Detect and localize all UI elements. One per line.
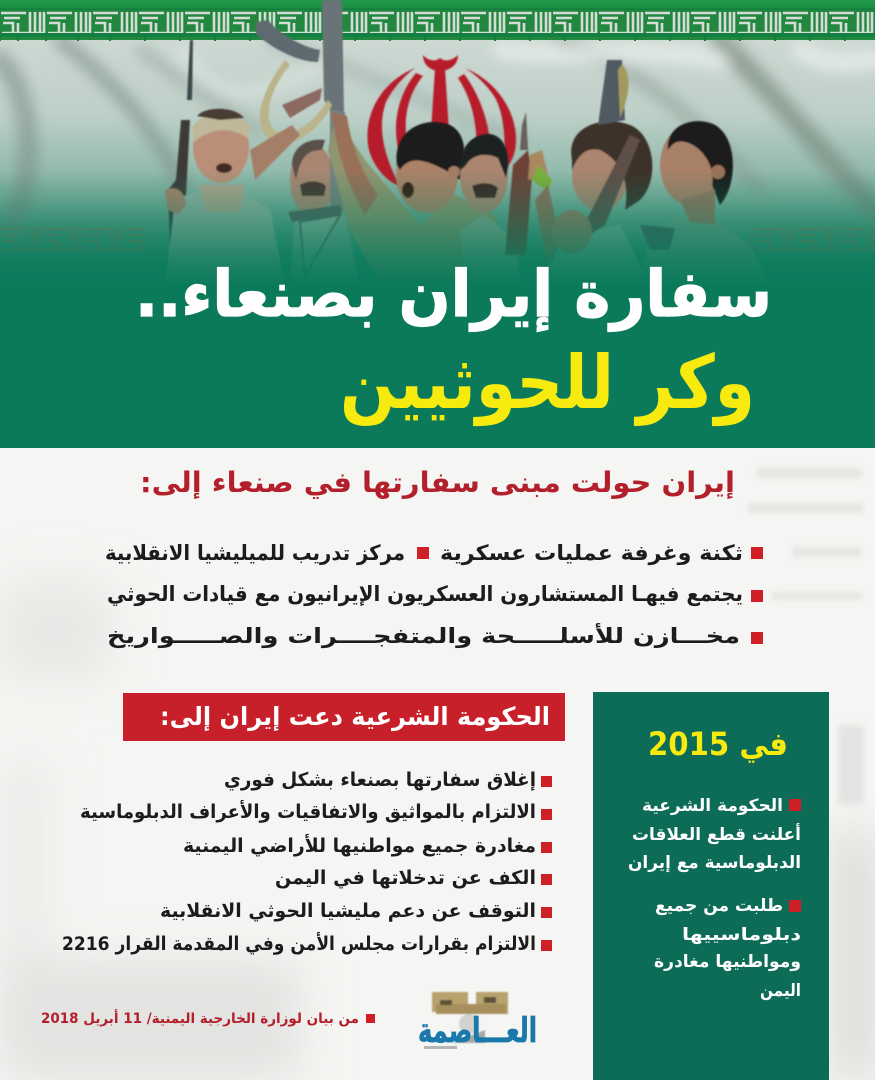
list: embassy uses: ثكنة وغرفة عمليات عسكرية (440, 541, 743, 565)
logo: Al-Asima (418, 992, 537, 1051)
panel paragraph one: الحكومة الشرعية (642, 796, 783, 816)
faded photo background of the lower panel (0, 448, 875, 1080)
panel: in 2015 (593, 692, 829, 1080)
green stripe and kufic band (0, 0, 875, 10)
panel paragraph one: الدبلوماسية مع إيران (628, 853, 801, 873)
red heading box (123, 693, 565, 741)
man with headband (165, 109, 300, 285)
list: embassy uses: يجتمع فيهـا المستشارون العسكريون الإيرانيون مع قيادات الحوثي (107, 582, 743, 606)
list: government demands: مغادرة جميع مواطنيها للأراضي اليمنية (183, 834, 536, 857)
list: government demands: التوقف عن دعم مليشيا الحوثي الانقلابية (160, 900, 536, 922)
panel paragraph one: أعلنت قطع العلاقات (632, 823, 801, 845)
panel paragraph two (654, 896, 801, 1001)
list: government demands: إغلاق سفارتها بصنعاء بشكل فوري (224, 769, 536, 792)
flag folds (0, 40, 875, 230)
panel paragraph two: دبلوماسييها (682, 925, 801, 945)
list: government demands: الالتزام بالمواثيق والاتفاقيات والأعراف الدبلوماسية (80, 800, 536, 823)
knife, bayonet rifle and gloved hand (505, 112, 560, 270)
panel paragraph two: ومواطنيها مغادرة (654, 952, 801, 972)
raised AK rifle and strap (256, 0, 344, 143)
man with moustache (460, 134, 520, 285)
list: government demands (62, 769, 552, 955)
panel paragraph two: طلبت من جميع (655, 896, 783, 916)
title: white line: سفارة إيران بصنعاء.. (135, 258, 772, 332)
green title band (0, 285, 875, 448)
emblem (367, 55, 516, 186)
man on the right (640, 121, 770, 285)
list: embassy uses (105, 541, 763, 648)
rifle left (168, 40, 193, 250)
red heading box: الحكومة الشرعية دعت إيران إلى: (160, 702, 550, 732)
list: government demands: الكف عن تدخلاتها في اليمن (275, 867, 536, 889)
panel paragraph one (628, 796, 801, 873)
list: government demands: الالتزام بقرارات مجلس الأمن وفي المقدمة القرار 2216 (62, 932, 536, 955)
man in camouflage (328, 112, 500, 285)
panel paragraph two: اليمن (760, 981, 801, 1001)
title: yellow line: وكر للحوثيين (340, 340, 755, 427)
source note: من بيان لوزارة الخارجية اليمنية/ 11 أبريل 2018 (41, 1009, 359, 1027)
main heading: red: إيران حولت مبنى سفارتها في صنعاء إلى: (140, 466, 735, 500)
logo: Al-Asima: العـــاصمة (418, 1011, 537, 1051)
panel heading: في 2015 (648, 725, 788, 763)
list: embassy uses: مخـــازن للأسلـــــحة والمتفجــــرات والصـــــواريخ (107, 622, 740, 648)
second man behind rifle (288, 110, 360, 285)
list: embassy uses: مركز تدريب للميليشيا الانقلابية (105, 541, 405, 565)
hero photo: Iranian flag and armed men (0, 0, 875, 290)
man aiming rifle (540, 60, 652, 285)
